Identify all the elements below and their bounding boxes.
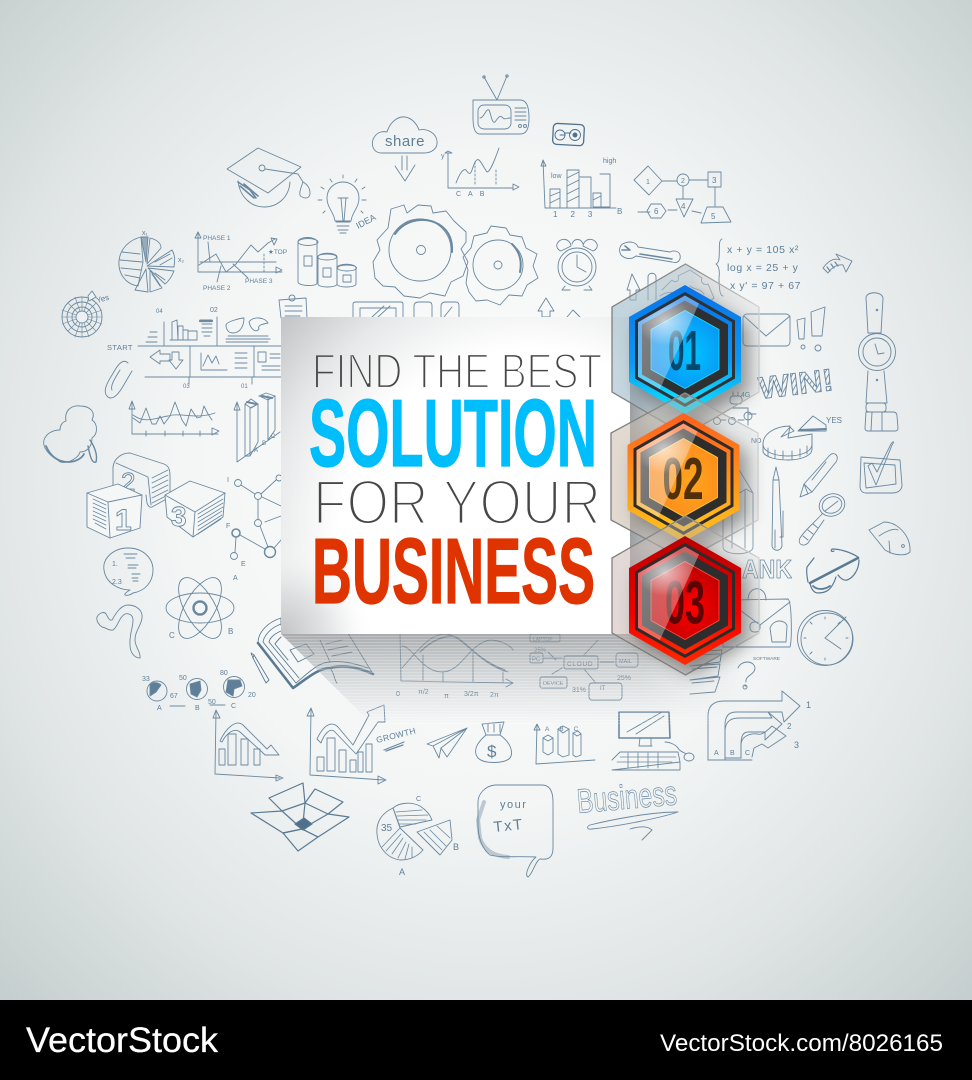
diagram: cloud network: 31% [572, 687, 586, 694]
icon: briefcase [723, 589, 791, 647]
drop shadow 1 [637, 294, 749, 424]
icon: small gear [463, 226, 538, 305]
diagram: cloud network: PC [532, 657, 541, 663]
cube 1: 1 [115, 504, 132, 537]
icon: wrist watch [858, 293, 898, 431]
icon: spiral target with yes: Yes [95, 293, 110, 305]
icon: graduation cap [227, 148, 310, 207]
diagram: cloud network: 25% [617, 675, 631, 682]
icon: atom [166, 571, 234, 645]
chart: start dashboard: 02 [210, 307, 218, 314]
icon: stacked books [690, 650, 722, 694]
chart: exploded pie sketch: x₁ [142, 230, 148, 237]
icon: question squiggle [97, 605, 142, 658]
chart: wave line chart [129, 401, 219, 436]
number 03: 03 [665, 568, 705, 636]
blue hexagon [629, 285, 741, 414]
chart: phases line: PHASE 2 [203, 285, 231, 292]
icon: speech bubble list [104, 548, 153, 595]
shadow right of card [630, 317, 690, 634]
chart: bar chart high low: low [551, 173, 562, 180]
chart: sketch pie: A [399, 867, 405, 877]
chart: start dashboard: START [107, 343, 133, 352]
diagram: network nodes: I [227, 477, 229, 484]
icon: pencil diagonal [800, 454, 837, 497]
chart: line with axes: y [441, 153, 445, 160]
heading line: business: BUSINESS [312, 519, 595, 623]
chart: phases line: ★TOP [268, 248, 287, 256]
diagram: network nodes [226, 475, 282, 582]
chart: bar chart high low: 123 [553, 210, 605, 219]
diagram: flow chart: 5 [711, 212, 716, 221]
icon: small symbols beside badges: 4G [741, 392, 750, 399]
icon: speech bubble list: 1. [112, 561, 118, 568]
diagram: cloud network: MAIL [619, 659, 632, 665]
long shadow under card [281, 634, 750, 724]
icon: pencil vertical [772, 467, 783, 550]
icon: puzzle behind glass [660, 270, 714, 312]
diagram: cloud network: CLOUD [567, 661, 593, 668]
chart: start dashboard: 04 [156, 309, 163, 315]
chart: sine curves [396, 633, 513, 700]
icon: question mark and software [738, 656, 780, 689]
doodle sketches [44, 75, 910, 877]
diagram: network nodes: A [233, 575, 238, 582]
chart: sketch pie [377, 796, 459, 877]
chart: falling bars [213, 710, 283, 781]
chart: line with axes: CAB [456, 191, 491, 198]
icon: alarm clock [557, 239, 597, 290]
chart: sketch pie: 35 [381, 823, 393, 834]
chart: sine curves: π/2 [418, 689, 429, 696]
icon: wall clock [798, 610, 853, 666]
chart: three mini pies: 20 [248, 692, 256, 699]
icon: paper plane [427, 728, 467, 758]
number 01: 01 [668, 319, 701, 383]
panel: headline card [281, 317, 630, 634]
diagram: network nodes: F [226, 523, 230, 530]
text: formulas: x y' = 97 + 67 [730, 280, 801, 292]
icon: clipboard [279, 295, 307, 318]
icon: three direction arrows: A [714, 750, 719, 757]
icon: three direction arrows: C [745, 750, 750, 757]
chart: 3d columns [534, 724, 595, 764]
icon: three direction arrows [708, 691, 811, 760]
orange hexagon [628, 413, 740, 540]
icon: magnifier [799, 490, 848, 545]
icon: light bulb with idea label: IDEA [354, 212, 377, 231]
text: formulas [716, 239, 801, 296]
text: bank sign: ANK [742, 554, 792, 584]
icon: spiral target with yes [62, 291, 110, 337]
heading line: find the best: FIND THE BEST [312, 345, 602, 399]
chart: three mini pies: C [231, 703, 236, 710]
icon: atom: B [228, 627, 233, 636]
chart: sine curves: π [444, 693, 449, 700]
chart: 3d pie yes no: NO [751, 438, 762, 445]
diagram: flow chart: 3 [712, 176, 717, 185]
icon: speech bubble list: 2.3 [112, 579, 122, 586]
icon: exclamation marks [797, 307, 825, 351]
icon: desktop computer [612, 712, 694, 770]
icon: arrows up [538, 273, 656, 317]
icon: go button [552, 123, 585, 146]
chart: 3d bars: A [254, 448, 258, 454]
icon: your txt speech bubble: TxT [493, 816, 525, 836]
chart: phases line: PHASE 1 [203, 235, 231, 242]
footer bar [0, 1000, 972, 1080]
cube 3: 3 [171, 501, 187, 532]
chart: start dashboard: 01 [241, 384, 248, 390]
glass hexagon 3 [612, 516, 759, 675]
chart: exploded pie sketch: x₂ [178, 257, 184, 264]
icon: money bag [476, 722, 512, 762]
chart: three mini pies: 67 [170, 693, 178, 700]
icon: open book and pen [251, 618, 373, 688]
glass reflection [638, 296, 699, 390]
icon: computer mouse [869, 522, 910, 555]
chart: 3d pie yes no [751, 416, 842, 460]
icon: tablet and phones [353, 302, 459, 317]
chart: sine curves: 0 [396, 691, 400, 698]
cube 2: 2 [121, 467, 135, 497]
drop shadow 2 [636, 421, 747, 550]
icon: three direction arrows: 1 [806, 700, 811, 710]
chart: three mini pies: 50 [208, 699, 216, 706]
badge 01 [612, 264, 759, 435]
icon: atom: C [169, 631, 175, 640]
icon: three direction arrows: 3 [794, 740, 799, 750]
chart: three mini pies: B [195, 705, 200, 712]
badge 02 [611, 393, 758, 560]
chart: 3d columns: ABC [545, 726, 588, 733]
icon: wrench [620, 242, 680, 263]
icon: large gear [373, 205, 468, 298]
chart: rising bars [307, 705, 386, 784]
chart: 3d bars [234, 393, 280, 462]
footer url: VectorStock.com/8026165 [660, 1030, 943, 1057]
diagram: flow chart: 1 [646, 179, 650, 186]
heading line: solution: SOLUTION [309, 380, 597, 487]
icon: small symbols beside badges [714, 392, 756, 425]
number 02: 02 [662, 446, 704, 512]
icon: open box [251, 783, 349, 851]
icon: your txt speech bubble [478, 785, 553, 877]
footer brand: VectorStock [26, 1021, 219, 1060]
icon: large pencil behind glass [723, 468, 753, 554]
icon: retro tv [473, 75, 529, 134]
heading line: for your: FOR YOUR [313, 468, 601, 538]
chart: start dashboard [107, 307, 281, 390]
chart: sketch pie: B [453, 842, 459, 852]
icon: paperclip [105, 361, 132, 398]
chart: phases line: PHASE 3 [245, 278, 273, 285]
icon: small curved arrow [823, 254, 852, 273]
chart: 3d bars: C [271, 434, 276, 440]
chart: sine curves: 2π [490, 692, 499, 699]
icon: money bag: $ [487, 742, 497, 761]
glass hexagon 1 [612, 264, 759, 435]
diagram: cloud network [530, 634, 638, 700]
diagram: cloud network: DEVICE [543, 681, 564, 687]
icon: share cloud [372, 117, 437, 181]
chart: line with axes [441, 148, 519, 198]
chart: sketch pie: C [416, 796, 421, 803]
chart: bar chart high low: B [617, 207, 622, 216]
text: formulas: log x = 25 + y [727, 262, 799, 274]
chart: 3d bars: B [262, 441, 266, 447]
icon: number cubes [87, 453, 225, 538]
glass hexagon 2 [611, 393, 758, 560]
text: win sign: WIN! [757, 362, 835, 406]
chart: three mini pies: 33 [142, 676, 150, 683]
badge 03 [612, 516, 759, 675]
glass reflection [638, 546, 699, 640]
diagram: flow chart: 2 [681, 178, 685, 185]
diagram: flow chart: 4 [681, 202, 686, 211]
icon: light bulb with idea label [318, 175, 377, 233]
red hexagon [629, 536, 741, 665]
text: business handwriting [575, 774, 678, 840]
diagram: flow chart: 6 [654, 207, 659, 216]
text: growth note: GROWTH [375, 725, 417, 745]
icon: three direction arrows: 2 [787, 722, 792, 731]
drop shadow 3 [637, 545, 749, 674]
diagram: network nodes: E [241, 561, 246, 568]
icon: envelope [743, 314, 790, 346]
chart: exploded pie sketch [119, 230, 184, 292]
chart: three mini pies: 80 [220, 670, 228, 677]
icon: share cloud: share [385, 133, 425, 150]
chart: 3d pie yes no: YES [826, 416, 842, 425]
icon: three direction arrows: B [730, 750, 735, 757]
icon: checkbox [860, 442, 902, 493]
text: business handwriting: Business [575, 774, 678, 821]
text: formulas: x + y = 105 x² [727, 244, 799, 256]
icon: eye glasses [807, 549, 859, 593]
chart: three mini pies [142, 670, 256, 712]
chart: three mini pies: A [157, 705, 162, 712]
chart: start dashboard: 03 [183, 384, 190, 390]
icon: storage cans [298, 238, 356, 287]
icon: thought cloud [44, 406, 97, 462]
diagram: cloud network: IT [600, 686, 606, 692]
chart: phases line [195, 232, 287, 292]
chart: sine curves: 3/2π [464, 691, 479, 698]
icon: your txt speech bubble: your [500, 799, 527, 811]
glass reflection [636, 424, 698, 518]
chart: bar chart high low: high [603, 158, 616, 165]
chart: three mini pies: 50 [179, 675, 187, 682]
chart: bar chart high low [541, 158, 622, 219]
diagram: cloud network: LAPTOP [533, 637, 553, 643]
icon: question mark and software: SOFTWARE [753, 656, 780, 662]
diagram: cloud network: 25% [534, 648, 547, 654]
diagram: flow chart [634, 166, 731, 223]
